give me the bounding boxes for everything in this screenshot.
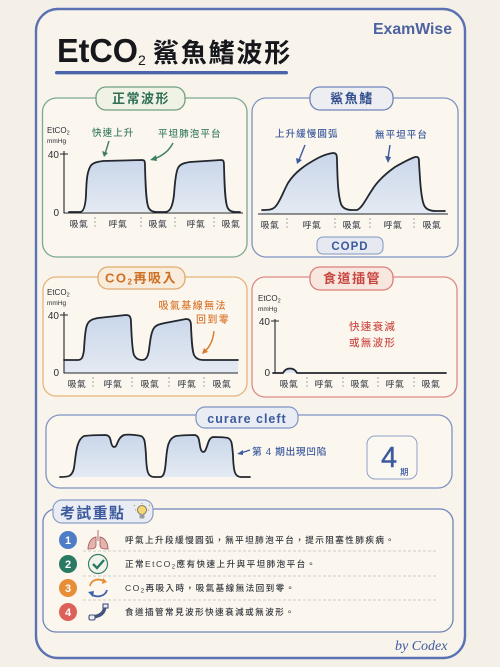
phase labels: 吸氣 — [280, 378, 298, 389]
phase labels: 呼氣 — [109, 218, 127, 229]
panel heading: shark fin: 鯊魚鰭 — [330, 91, 374, 106]
waveform — [64, 315, 238, 373]
brand: ExamWise: ExamWise — [373, 21, 452, 38]
number badge 4 — [59, 603, 77, 621]
phase labels: 吸氣 — [213, 378, 231, 389]
number badge 3 — [59, 579, 77, 597]
panel heading: shark fin — [310, 87, 393, 110]
annotation: fast rise — [92, 127, 134, 157]
icon: lungs — [88, 530, 108, 549]
number badge 3: 3 — [65, 583, 71, 595]
y axis labels: EtCO — [47, 126, 67, 135]
axes — [60, 312, 238, 373]
phase labels: 吸氣 — [261, 219, 279, 230]
phase labels: 呼氣 — [386, 378, 404, 389]
number badge 2: 2 — [65, 559, 71, 571]
annotation: flat plateau: 平坦肺泡平台 — [158, 128, 222, 140]
phase labels: 呼氣 — [187, 218, 205, 229]
badge: COPD: COPD — [331, 241, 369, 253]
y axis labels: 40 — [259, 317, 270, 328]
annotation: fast rise: 快速上升 — [92, 127, 134, 139]
phase labels: 吸氣 — [343, 219, 361, 230]
phase labels: 呼氣 — [104, 378, 122, 389]
waveform with cleft — [60, 435, 250, 477]
panel heading: esophageal intubation — [310, 267, 393, 290]
phase labels: 吸氣 — [423, 219, 441, 230]
phase labels: 吸氣 — [422, 378, 440, 389]
badge: phase 4: 4 — [381, 442, 397, 474]
y axis labels: mmHg — [47, 300, 67, 307]
y axis labels: 2 — [67, 130, 70, 136]
number badge 4: 4 — [65, 607, 72, 619]
title: EtCO — [57, 32, 138, 69]
waveform — [262, 153, 445, 214]
phase labels: 吸氣 — [149, 218, 167, 229]
phase labels: 吸氣 — [351, 378, 369, 389]
icon: tube — [89, 604, 108, 620]
phase labels: 吸氣 — [222, 218, 240, 229]
icon: light bulb — [134, 503, 150, 518]
y axis labels: EtCO — [47, 288, 67, 297]
y axis labels: 2 — [278, 298, 281, 304]
row 1: 呼氣上升段緩慢圓弧，無平坦肺泡平台，提示阻塞性肺疾病。 — [125, 534, 395, 545]
annotation: rapid decline: 快速衰減 — [349, 320, 396, 333]
annotation: phase 4 cleft: 第 4 期出現凹陷 — [252, 445, 327, 458]
annotation: no plateau: 無平坦平台 — [375, 129, 428, 141]
title — [57, 32, 292, 69]
title: 鯊魚鰭波形 — [153, 38, 292, 68]
y axis labels: mmHg — [258, 306, 278, 313]
phase labels: 呼氣 — [384, 219, 402, 230]
row 4 — [59, 603, 295, 621]
number badge 1 — [59, 531, 77, 549]
panel heading: exam key points — [53, 500, 153, 523]
y axis labels: EtCO — [258, 294, 278, 303]
row dividers — [83, 551, 438, 600]
annotation: slow rise — [275, 128, 339, 164]
panel: CO2 rebreathing — [43, 267, 247, 396]
annotation: slow rise: 上升緩慢圓弧 — [275, 128, 339, 140]
phase labels: 呼氣 — [178, 378, 196, 389]
phase labels: 呼氣 — [303, 219, 321, 230]
y axis labels: mmHg — [47, 138, 67, 145]
flat waveform with bump — [273, 368, 446, 373]
title underline — [55, 71, 288, 74]
annotation: baseline not zero — [158, 299, 230, 354]
number badge 1: 1 — [65, 535, 71, 547]
axes — [271, 319, 279, 373]
badge: phase 4 — [367, 436, 417, 479]
annotation: flat plateau — [150, 128, 222, 161]
baseline — [258, 213, 448, 215]
waveform — [69, 160, 240, 212]
y axis labels: 0 — [264, 368, 270, 379]
y axis labels: 2 — [67, 292, 70, 298]
annotation: rapid decline: 或無波形 — [349, 336, 396, 349]
phase labels: 吸氣 — [68, 378, 86, 389]
phase labels — [68, 377, 231, 389]
y axis labels: 40 — [48, 311, 59, 322]
row 2: 正常EtCO — [125, 559, 172, 569]
panel heading: curare cleft — [196, 407, 298, 428]
row 2: 2 — [172, 564, 176, 570]
row 2: 應有快速上升與平坦肺泡平台。 — [176, 558, 317, 569]
panel heading: CO2 rebreathing: 再吸入 — [133, 270, 177, 286]
panel: normal waveform — [42, 87, 247, 257]
phase labels — [261, 218, 441, 230]
row 3: CO — [125, 583, 141, 593]
panel heading: normal waveform: 正常波形 — [112, 91, 170, 106]
phase labels — [280, 377, 440, 389]
panel: exam key points — [43, 500, 453, 632]
badge: COPD — [317, 237, 383, 254]
annotation: baseline not zero: 回到零 — [196, 314, 230, 326]
badge: phase 4: 期 — [400, 467, 409, 477]
y axis labels — [258, 294, 281, 379]
y axis labels — [47, 288, 70, 379]
icon: check — [88, 554, 108, 574]
title: 2 — [138, 52, 146, 68]
phase labels: 呼氣 — [315, 378, 333, 389]
panel heading: CO2 rebreathing — [98, 267, 185, 289]
phase labels: 吸氣 — [70, 218, 88, 229]
row 4: 食道插管常見波形快速衰減或無波形。 — [125, 606, 295, 617]
panel heading: CO2 rebreathing: 2 — [128, 278, 133, 286]
panel: curare cleft — [46, 407, 452, 488]
icon: recycle arrows — [88, 578, 107, 597]
panel: esophageal intubation — [252, 267, 457, 397]
y axis labels: 0 — [53, 368, 59, 379]
y axis labels: 0 — [53, 208, 59, 219]
annotation: rapid decline — [349, 320, 396, 349]
axes — [60, 151, 243, 213]
y axis labels — [47, 126, 70, 219]
panel heading: exam key points: 考試重點 — [60, 504, 125, 522]
row 3 — [59, 578, 296, 597]
row 1 — [59, 530, 395, 549]
y axis labels: 40 — [48, 150, 59, 161]
panel heading: CO2 rebreathing: CO — [105, 270, 128, 286]
annotation: no plateau — [375, 129, 428, 163]
row 3: 再吸入時，吸氣基線無法回到零。 — [146, 582, 296, 593]
signature: by Codex: by Codex — [395, 639, 448, 654]
phase labels: 吸氣 — [141, 378, 159, 389]
panel heading: normal waveform — [96, 87, 185, 110]
panel: shark fin — [252, 87, 458, 257]
phase labels — [70, 217, 240, 229]
panel heading: curare cleft: curare cleft — [207, 412, 287, 426]
panel heading: esophageal intubation: 食道插管 — [323, 271, 381, 286]
number badge 2 — [59, 555, 77, 573]
row 2 — [59, 554, 317, 574]
row 3: 2 — [141, 588, 146, 594]
annotation: baseline not zero: 吸氣基線無法 — [158, 299, 227, 312]
